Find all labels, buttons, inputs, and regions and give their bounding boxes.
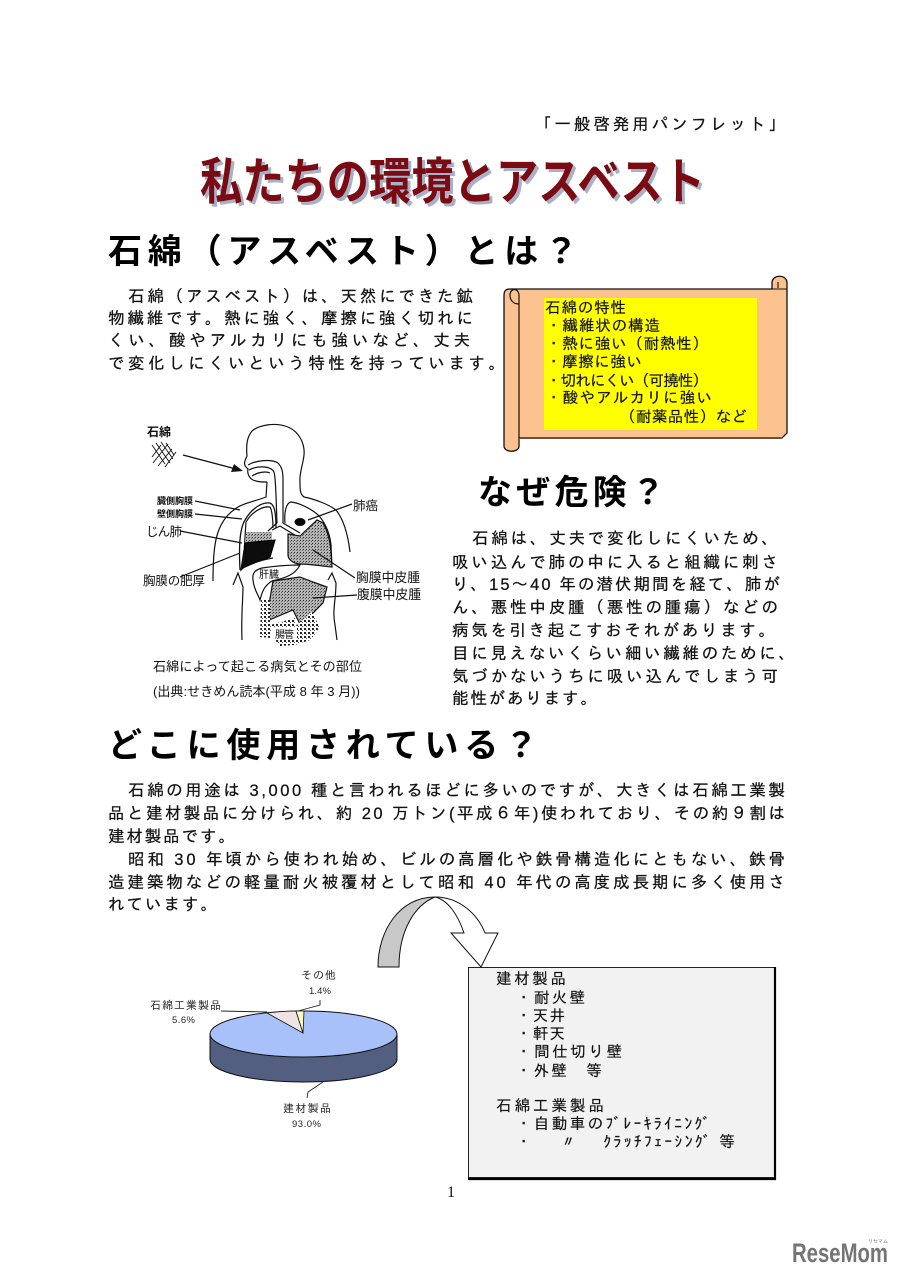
icon: asbestos fibers [152,442,176,467]
figure caption [153,659,362,699]
heading: what is asbestos: 石綿（アスベスト）とは？ [108,233,578,271]
diagram labels [143,424,421,641]
text block: where used: 石綿の用途は 3,000 種と言われるほどに多いのですが、大きくは石綿工業製 [128,782,785,800]
panel: product list: 石綿工業製品 [496,1097,604,1115]
arrow: inhalation [183,455,243,472]
pamphlet label: 「一般啓発用パンフレット」 [535,116,785,134]
diagram labels: 腸管 [275,628,294,641]
text block: why dangerous: 気づかないうちに吸い込んでしまう可 [452,667,778,686]
diagram labels: 壁側胸膜 [157,508,193,519]
panel: scroll of asbestos properties: ・熱に強い（耐熱性） [546,335,708,353]
diagram labels: 胸膜中皮腫 [356,570,420,585]
figure: human body diagram of asbestos diseases [143,424,421,699]
panel: product list: ・軒天 [516,1026,565,1043]
title: 私たちの環境とアスベスト [203,157,708,213]
panel: product list: ・天井 [516,1008,565,1025]
panel: product list: ・耐火壁 [516,990,585,1007]
text block: why dangerous [452,530,795,708]
leader lines [180,501,357,598]
panel: scroll of asbestos properties: ・摩擦に強い [546,354,642,371]
panel: scroll of asbestos properties: ・酸やアルカリに強い [546,390,712,407]
panel: scroll of asbestos properties: （耐薬品性）など [620,409,747,426]
pie labels: 建材製品 [283,1103,331,1115]
diagram labels: 胸膜の肥厚 [143,573,205,588]
text block: where used: れています。 [108,896,217,914]
text block: why dangerous: 石綿は、丈夫で変化しにくいため、 [472,530,778,548]
panel: product list [468,967,775,1179]
figure caption: 石綿によって起こる病気とその部位 [153,659,362,674]
pie labels [150,970,336,1130]
panel: scroll of asbestos properties: ・切れにくい（可撓性） [546,372,708,390]
pie labels: 石綿工業製品 [150,999,221,1012]
arrow: curved arrow to product list [378,897,498,967]
pie labels: 93.0% [292,1119,322,1130]
panel: scroll of asbestos properties: ・繊維状の構造 [546,317,660,335]
panel: product list: ・自動車のﾌﾞﾚｰｷﾗｲﾆﾝｸﾞ [516,1115,710,1133]
text block: why dangerous: ん、悪性中皮腫（悪性の腫瘍）などの [452,599,778,617]
panel: product list: ・ 〃 ｸﾗｯﾁﾌｪｰｼﾝｸﾞ 等 [516,1133,735,1151]
diagram labels: 臓側胸膜 [157,495,193,506]
panel: scroll of asbestos properties: 石綿の特性 [545,299,626,317]
text block: where used: 建材製品です。 [108,828,235,846]
diagram labels: じん肺 [146,525,182,539]
text block: asbestos intro: 石綿（アスベスト）は、天然にできた鉱 [128,288,473,306]
heading: where used: どこに使用されている？ [108,727,538,765]
liver, peritoneum and intestines [233,558,337,646]
panel: product list: ・外壁 等 [516,1062,602,1080]
text block: where used [108,782,785,914]
pie labels: 1.4% [309,986,332,997]
diagram labels: 肺癌 [353,499,378,513]
pie labels: 5.6% [172,1015,196,1026]
lungs [240,502,332,570]
body outline [213,424,350,581]
diagram labels: 石綿 [147,424,171,439]
text block: asbestos intro: 物繊維です。熱に強く、摩擦に強く切れに [108,310,473,328]
chart: pie chart of asbestos use [150,970,397,1130]
text block: why dangerous: 目に見えないくらい細い繊維のために、 [452,645,795,663]
text block: asbestos intro: で変化しにくいという特性を持っています。 [108,355,505,373]
diagram labels: 腹膜中皮腫 [357,587,421,602]
text block: where used: 昭和 30 年頃から使われ始め、ビルの高層化や鉄骨構造化にともない、鉄骨 [128,851,785,869]
page number: 1 [447,1184,455,1201]
text block: why dangerous: 病気を引き起こすおそれがあります。 [452,622,775,640]
heading: why dangerous: なぜ危険？ [478,474,665,512]
text block: asbestos intro [108,288,505,373]
panel: scroll of asbestos properties [504,276,787,451]
panel: product list: 建材製品 [496,971,566,988]
text block: where used: 品と建材製品に分けられ、約 20 万トン(平成６年)使われており、その約９割は [108,805,785,823]
pie labels: その他 [301,970,336,982]
logo: ReseMom: リセマム [868,1239,888,1245]
text block: asbestos intro: くい、酸やアルカリにも強いなど、丈夫 [108,332,470,350]
text block: why dangerous: 能性があります。 [452,690,597,708]
diagram labels: 肝臓 [259,569,279,581]
panel: product list: ・間仕切り壁 [516,1044,622,1061]
text block: why dangerous: 吸い込んで肺の中に入ると組織に刺さ [452,554,778,572]
title: 私たちの環境とアスベスト [200,154,705,210]
text block: where used: 造建築物などの軽量耐火被覆材として昭和 40 年代の高度成長期に多く使用さ [108,874,785,892]
text block: why dangerous: り、15～40 年の潜伏期間を経て、肺が [452,576,780,594]
figure caption: (出典:せきめん読本(平成 8 年 3 月)) [153,684,360,699]
